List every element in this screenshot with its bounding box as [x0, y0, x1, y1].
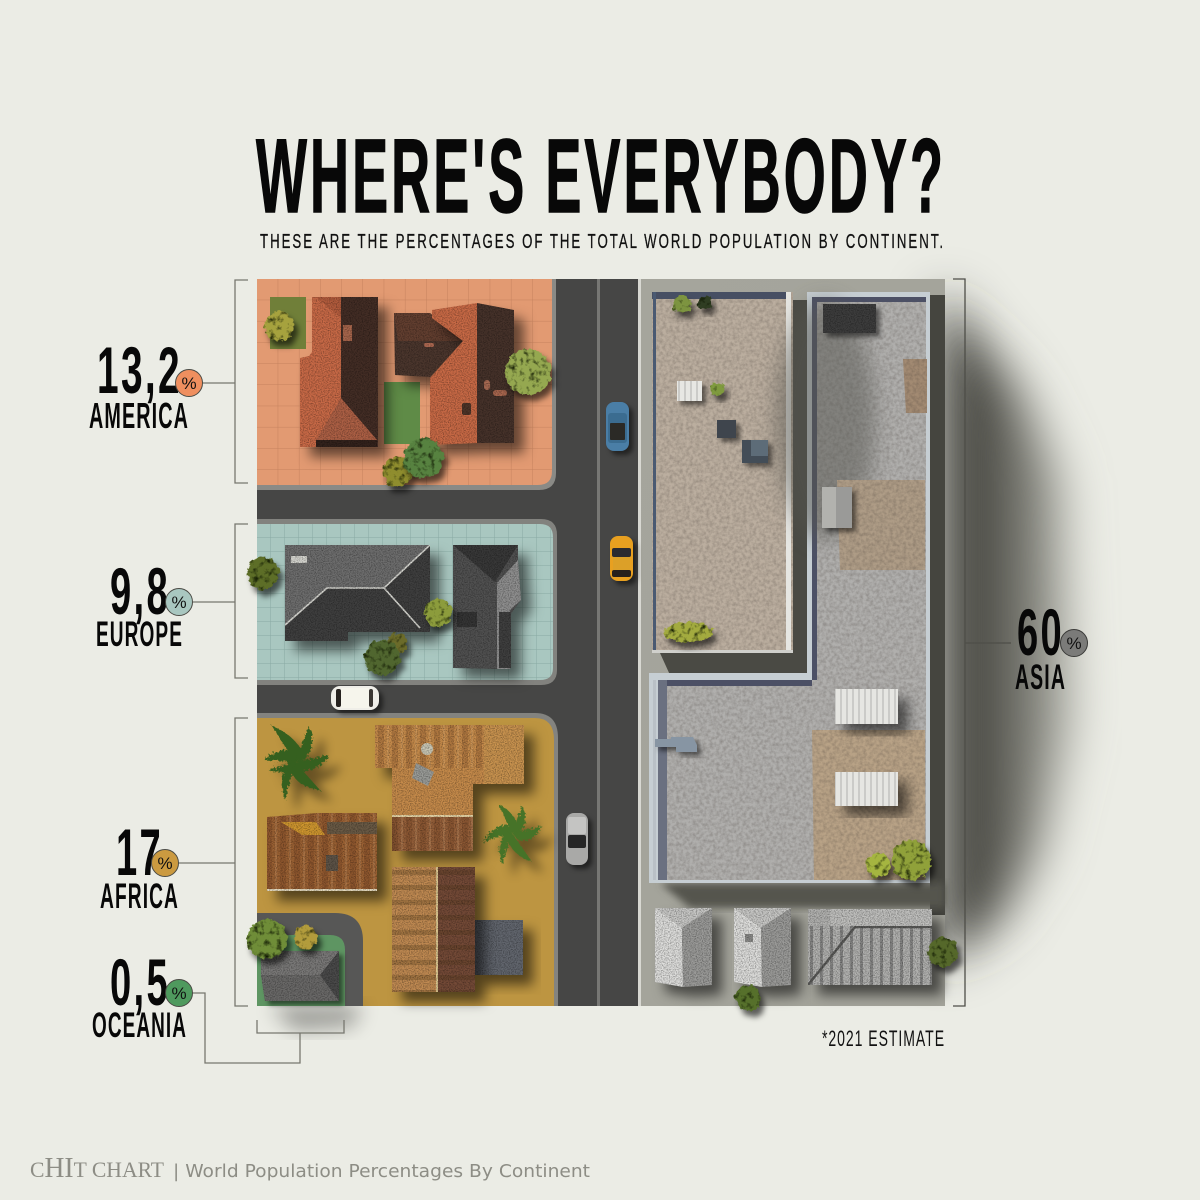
label: europe: 9,8 [110, 554, 170, 628]
label: oceania: OCEANIA [92, 1006, 187, 1045]
house: right [430, 303, 514, 445]
house: left [267, 813, 377, 891]
house: left [285, 545, 430, 641]
tree [294, 925, 318, 949]
footer brand: CHIT CHART [30, 1153, 165, 1184]
rooftop unit: white panel [835, 689, 898, 724]
footer caption: | World Population Percentages By Continent [173, 1161, 590, 1182]
rooftop unit: white panel [835, 772, 898, 806]
house: centre [394, 313, 463, 377]
house: left [300, 297, 378, 447]
tree [264, 311, 294, 341]
rooftop unit: dark box [742, 440, 768, 463]
tree [403, 438, 443, 478]
bracket: america [203, 280, 248, 483]
tree [673, 295, 691, 313]
road [257, 279, 641, 1006]
label: africa: % [157, 854, 173, 873]
label: america: AMERICA [89, 395, 189, 436]
car: silver [566, 813, 588, 865]
rooftop unit: white box [677, 381, 702, 401]
house: long roof [392, 867, 475, 992]
tree [247, 919, 287, 959]
building: right L-shaped roof [649, 292, 930, 883]
label: europe: EUROPE [96, 615, 183, 654]
tree [928, 937, 958, 967]
bracket: africa [178, 718, 248, 1006]
tree [247, 557, 279, 589]
label: africa: AFRICA [100, 877, 179, 916]
house: right [453, 545, 521, 669]
building: left roof [652, 292, 793, 653]
rooftop unit: side duct [655, 737, 697, 752]
label: oceania [92, 945, 192, 1045]
map: city block illustration [247, 279, 958, 1030]
label: asia: ASIA [1015, 658, 1066, 697]
bracket: oceania [192, 993, 344, 1063]
bracket: asia [953, 279, 1011, 1006]
tree [735, 985, 761, 1011]
label: europe [96, 554, 192, 654]
tree [710, 382, 724, 396]
tan patches [837, 480, 925, 570]
tree [424, 599, 452, 627]
panel: america block [257, 279, 556, 490]
house: grey wide [808, 909, 932, 985]
label: america: % [181, 374, 197, 393]
shadow of buildings on ground [660, 295, 945, 915]
lawn centre [384, 382, 420, 444]
tree [505, 349, 551, 395]
label: america: 13,2 [97, 333, 182, 407]
panel: africa block [257, 713, 558, 1006]
label: africa: 17 [116, 815, 163, 889]
tree [866, 840, 931, 880]
asia cast shadow [940, 290, 1070, 965]
panel: asia block [641, 279, 958, 1011]
label: europe: % [171, 593, 187, 612]
house [261, 951, 339, 1001]
rooftop unit: metal box [822, 487, 852, 528]
car: white [331, 686, 379, 710]
panel: oceania block [247, 913, 363, 1030]
house: grey middle [734, 908, 791, 987]
palm tree [482, 804, 542, 864]
tree [698, 296, 712, 310]
bracket: europe [193, 524, 248, 678]
palm tree [264, 726, 329, 800]
house: grey left [655, 908, 712, 987]
rooftop unit: dark vent [823, 304, 876, 333]
house: grey annex [472, 920, 523, 975]
label: asia: 60 [1017, 595, 1064, 669]
rooftop unit: dark box [717, 420, 736, 438]
tree [364, 633, 407, 676]
label: oceania: 0,5 [110, 945, 170, 1019]
car: yellow [610, 536, 633, 581]
label: america [89, 333, 202, 436]
panel: europe block [247, 519, 557, 685]
label: oceania: % [171, 984, 187, 1003]
label: asia: % [1066, 634, 1082, 653]
car: blue [606, 402, 629, 451]
label: asia [1015, 595, 1088, 697]
bush [663, 622, 713, 642]
lawn [270, 297, 306, 349]
tree [383, 457, 413, 487]
footnote: *2021 ESTIMATE [822, 1026, 945, 1051]
label: africa [100, 815, 179, 916]
house: top right [375, 725, 524, 851]
